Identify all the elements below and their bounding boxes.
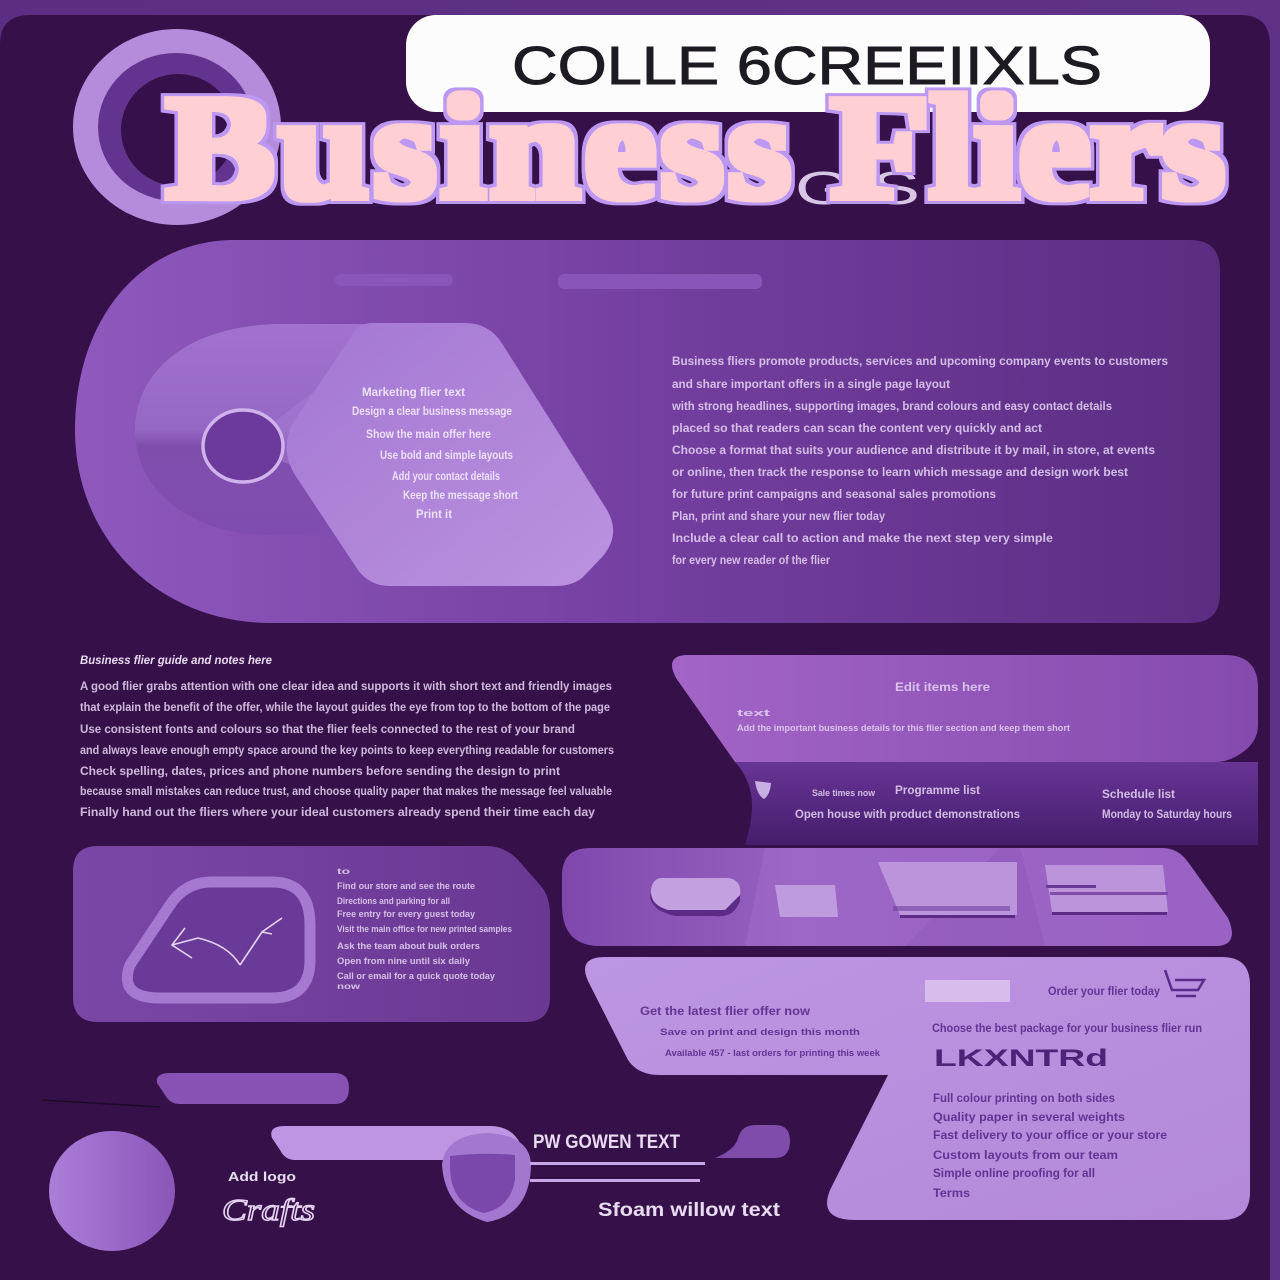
text block: left column: Use consistent fonts and colours so that the flier feels connected to the rest of your brand xyxy=(80,724,575,736)
map card text: Directions and parking for all xyxy=(337,896,450,906)
icon: route frame xyxy=(127,882,310,998)
offer card text: Save on print and design this month xyxy=(660,1027,860,1037)
flier sample 3 xyxy=(878,862,1017,918)
text block: left column: and always leave enough empty space around the key points to keep everything readable for customers xyxy=(80,745,614,757)
bottom circle xyxy=(49,1131,175,1251)
offer card text: Choose the best package for your business flier run xyxy=(932,1023,1202,1035)
flier sample 1 xyxy=(650,878,740,916)
hexagon card text: Add your contact details xyxy=(392,471,500,483)
small end pill xyxy=(715,1125,790,1158)
offer card text: LKXNTRd xyxy=(934,1045,1108,1072)
feature body text: Plan, print and share your new flier today xyxy=(672,511,886,523)
panel: map card xyxy=(73,846,550,1022)
offer card text: Get the latest flier offer now xyxy=(640,1006,810,1018)
feature body text: Include a clear call to action and make the next step very simple xyxy=(672,533,1053,545)
map card text: Free entry for every guest today xyxy=(337,909,475,919)
callout text: Add the important business details for this flier section and keep them short xyxy=(737,723,1070,733)
callout text: text xyxy=(737,708,770,718)
hexagon card text: Keep the message short xyxy=(403,490,518,502)
hexagon card text: Marketing flier text xyxy=(362,387,465,399)
panel: light offer card xyxy=(585,957,1250,1220)
callout text xyxy=(737,682,1232,821)
offer card text: Custom layouts from our team xyxy=(933,1150,1118,1162)
bottom bar xyxy=(271,1126,525,1160)
header bars xyxy=(335,274,762,289)
small caption: Crafts xyxy=(222,1192,315,1227)
feature body text: and share important offers in a single page layout xyxy=(672,379,950,391)
feature body text: for future print campaigns and seasonal sales promotions xyxy=(672,489,996,501)
text block: left column: because small mistakes can reduce trust, and choose quality paper that makes the message feel valuable xyxy=(80,786,612,798)
feature body text: with strong headlines, supporting images, brand colours and easy contact details xyxy=(671,401,1112,413)
hexagon card text: Print it xyxy=(416,509,452,521)
small caption xyxy=(222,1169,315,1227)
map card text xyxy=(337,867,512,991)
callout text: Schedule list xyxy=(1102,789,1175,801)
hexagon card text: Design a clear business message xyxy=(352,406,512,418)
icon: shield xyxy=(442,1133,531,1222)
text block: left column xyxy=(80,655,614,819)
feature body text: for every new reader of the flier xyxy=(672,555,830,567)
callout text: Sale times now xyxy=(812,788,876,798)
header pill with heading xyxy=(406,15,1210,112)
callout text: Open house with product demonstrations xyxy=(795,809,1020,821)
text block: left column: that explain the benefit of the offer, while the layout guides the eye from top to the bottom of the page xyxy=(80,702,610,714)
text block: left column: Business flier guide and notes here xyxy=(80,655,273,667)
bottom text block xyxy=(530,1132,781,1221)
text block: left column: A good flier grabs attention with one clear idea and supports it with short text and friendly images xyxy=(80,681,612,693)
small caption: Add logo xyxy=(228,1169,296,1184)
hexagon card text: Show the main offer here xyxy=(366,429,491,441)
callout text: Edit items here xyxy=(895,682,990,694)
map card text: Ask the team about bulk orders xyxy=(337,941,480,951)
callout text: Programme list xyxy=(895,785,980,797)
map card text: Visit the main office for new printed samples xyxy=(337,924,512,934)
bottom text block: Sfoam willow text xyxy=(598,1200,781,1221)
offer card text: Full colour printing on both sides xyxy=(933,1093,1115,1105)
flier sample 4 xyxy=(1045,865,1168,915)
offer card text: Available 457 - last orders for printing this week xyxy=(665,1048,881,1058)
feature body text: Choose a format that suits your audience and distribute it by mail, in store, at events xyxy=(672,445,1155,457)
map card text: Find our store and see the route xyxy=(337,881,475,891)
header pill with heading: COLLE 6CREEIIXLS xyxy=(512,36,1102,96)
icon: small shield xyxy=(755,781,771,799)
feature body text xyxy=(671,356,1168,567)
offer card text: Order your flier today xyxy=(1048,986,1161,998)
feature body text: placed so that readers can scan the content very quickly and act xyxy=(672,423,1042,435)
title: Business xyxy=(166,65,795,229)
hexagon card text xyxy=(352,387,518,521)
callout text: Monday to Saturday hours xyxy=(1102,809,1232,821)
map card text: Open from nine until six daily xyxy=(337,956,470,966)
offer card text: Terms xyxy=(933,1188,970,1200)
panel: top right callout xyxy=(672,655,1258,845)
flier sample 2 xyxy=(775,885,838,917)
disc centre circle xyxy=(203,410,283,482)
bottom text block: PW GOWEN TEXT xyxy=(533,1132,680,1153)
offer card text xyxy=(640,980,1202,1200)
panel: flier samples bar xyxy=(562,848,1232,946)
map card text: to xyxy=(337,867,350,876)
offer card text: Quality paper in several weights xyxy=(933,1112,1125,1124)
map card text: Call or email for a quick quote today xyxy=(337,971,495,981)
panel: main feature xyxy=(75,240,1220,623)
offer card text: Fast delivery to your office or your store xyxy=(933,1130,1167,1142)
title: Fliers xyxy=(830,65,1224,229)
icon: shopping cart xyxy=(1165,970,1204,996)
subheading fragment behind title: G S xyxy=(795,162,920,214)
disc graphic xyxy=(135,324,420,535)
hexagon card xyxy=(286,323,613,586)
hexagon card text: Use bold and simple layouts xyxy=(380,450,513,462)
text block: left column: Check spelling, dates, prices and phone numbers before sending the design to print xyxy=(80,766,560,778)
light bands xyxy=(745,848,1232,946)
text block: left column: Finally hand out the fliers where your ideal customers already spend their time each day xyxy=(80,807,596,819)
map card text: now xyxy=(337,982,361,991)
icon: concentric ring logo xyxy=(73,29,281,225)
feature body text: Business fliers promote products, services and upcoming company events to customers xyxy=(672,356,1168,368)
thin rule xyxy=(42,1100,160,1107)
offer card text: Simple online proofing for all xyxy=(933,1168,1095,1180)
bottom pill xyxy=(157,1073,349,1104)
feature body text: or online, then track the response to learn which message and design work best xyxy=(672,467,1128,479)
